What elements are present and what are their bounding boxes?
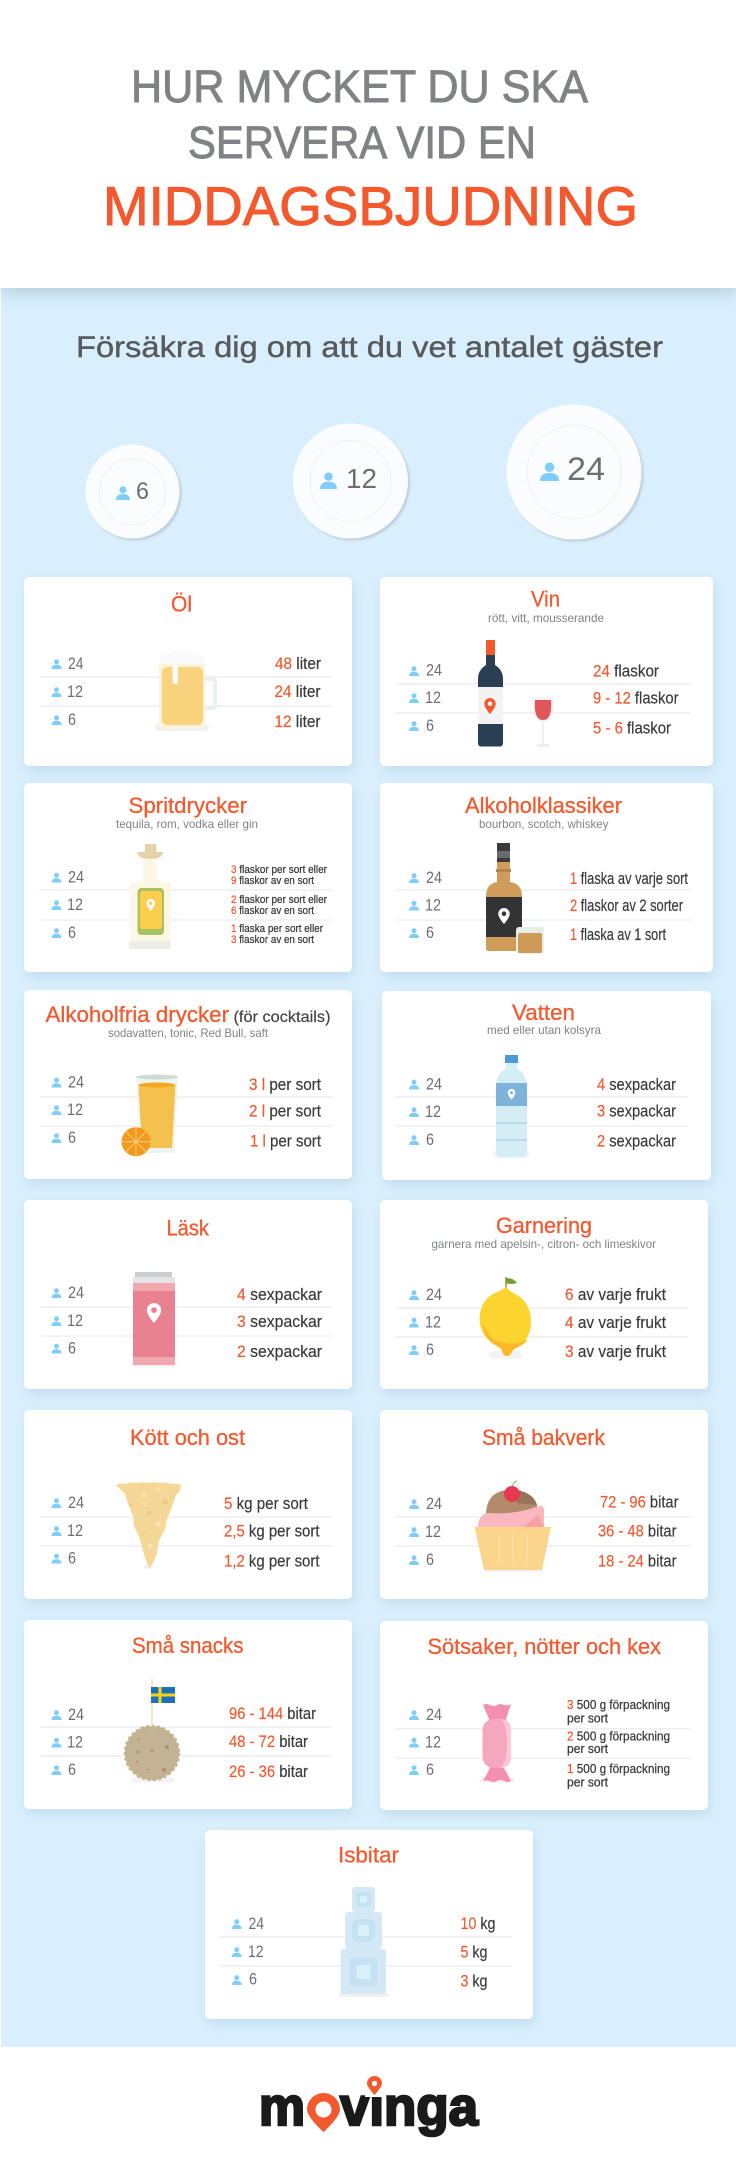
- heading: Isbitar: Isbitar: [338, 1843, 399, 1868]
- row: 6 guests: 1,2 kg per sort: [224, 1552, 320, 1571]
- title line 2: SERVERA VID EN: [188, 117, 536, 168]
- panel: Läsk: [24, 1200, 352, 1389]
- heading: Garnering: Garnering: [496, 1213, 592, 1238]
- icon: wine bottle: [478, 640, 503, 746]
- title line 3: MIDDAGSBJUDNING: [103, 175, 638, 237]
- row: 24 guests: 24: [426, 661, 442, 680]
- heading: Spritdrycker: Spritdrycker: [128, 793, 247, 818]
- row: 24 guests: 4 sexpackar: [597, 1075, 676, 1094]
- row: 24 guests: 24: [68, 654, 84, 673]
- row: 12 guests: 2 l per sort: [249, 1102, 321, 1121]
- row: 6 guests: [409, 1340, 666, 1361]
- row: 6 guests: per sort: [567, 1776, 608, 1790]
- title line 1: HUR MYCKET DU SKA: [131, 61, 588, 112]
- row: 6 guests: 6: [426, 923, 434, 942]
- icon: lemon: [480, 1277, 531, 1359]
- row: 24 guests: 24: [68, 1283, 84, 1302]
- plate: 24 guests: [506, 404, 642, 540]
- footer panel: [0, 2047, 736, 2168]
- row: 12 guests: 9 - 12 flaskor: [593, 689, 679, 708]
- heading: Små snacks: Små snacks: [132, 1633, 244, 1658]
- row: 6 guests: [52, 710, 321, 731]
- row: 6 guests: 1 l per sort: [250, 1132, 321, 1151]
- panel: Kött och ost: [24, 1410, 352, 1599]
- row: 24 guests: [409, 1698, 670, 1726]
- row: 12 guests: 2,5 kg per sort: [224, 1522, 320, 1541]
- row: 24 guests: [52, 1704, 316, 1724]
- heading: Vatten: Vatten: [512, 1000, 575, 1025]
- subheading: Spritdrycker: tequila, rom, vodka eller gin: [116, 817, 258, 831]
- row: 12 guests: 48 - 72 bitar: [229, 1732, 308, 1751]
- row: 6 guests: [52, 1549, 320, 1571]
- row: 6 guests: 18 - 24 bitar: [598, 1552, 677, 1571]
- row: 24 guests: 6 av varje frukt: [565, 1285, 666, 1304]
- row: 24 guests: [52, 654, 321, 673]
- panel: Sötsaker, nötter och kex: [380, 1621, 708, 1810]
- heading: Öl: Öl: [171, 592, 192, 616]
- row: 12 guests: [409, 1102, 676, 1121]
- row: 24 guests: per sort: [567, 1712, 608, 1726]
- logo: movinga: o: [315, 2093, 332, 2123]
- row: 24 guests: 3 500 g förpackning: [567, 1698, 670, 1712]
- panel: Vatten: [382, 991, 711, 1180]
- row: 6 guests: [52, 1760, 308, 1781]
- row: 24 guests: 3 flaskor per sort eller: [231, 864, 327, 876]
- row: 12 guests: [409, 688, 679, 708]
- panel: Öl: [24, 577, 352, 766]
- row: 12 guests: 2 flaskor av 2 sorter: [570, 896, 683, 915]
- icon: whiskey bottle: [486, 843, 522, 951]
- row: 24 guests: [409, 868, 688, 888]
- row: 24 guests: 48 liter: [275, 654, 321, 673]
- row: 12 guests: [52, 1311, 322, 1331]
- icon: tequila bottle: [129, 844, 171, 949]
- subheading: Vatten: med eller utan kolsyra: [487, 1023, 601, 1037]
- row: 12 guests: 12: [425, 688, 441, 707]
- row: 24 guests: [409, 1075, 676, 1094]
- panel: Vin: [380, 577, 713, 766]
- row: 24 guests: [409, 1285, 666, 1304]
- heading: Alkoholfria drycker: Alkoholfria drycker: [46, 1002, 229, 1027]
- row: 6 guests: [52, 923, 323, 946]
- row: 6 guests: 6: [426, 1340, 434, 1359]
- header panel: [0, 0, 736, 288]
- row: 24 guests: 3 l per sort: [249, 1075, 321, 1094]
- icon: candy: [479, 1704, 515, 1783]
- row: 12 guests: [52, 894, 327, 917]
- row: 24 guests: [52, 864, 327, 887]
- row: 24 guests: [52, 1073, 321, 1094]
- icon: ice cubes: [339, 1887, 388, 1997]
- row: 24 guests: 96 - 144 bitar: [229, 1704, 316, 1723]
- row: 24 guests: 24 flaskor: [593, 662, 659, 681]
- row: 6 guests: 3 kg: [460, 1972, 488, 1991]
- row: 24 guests: [52, 1493, 308, 1513]
- icon: cupcake: [474, 1481, 551, 1572]
- panel: Alkoholfria drycker: [24, 990, 352, 1179]
- row: 12 guests: 12: [425, 1102, 441, 1121]
- row: 12 guests: per sort: [567, 1742, 608, 1756]
- row: 12 guests: 12: [67, 895, 83, 914]
- panel: Garnering: [380, 1200, 708, 1389]
- row: 12 guests: 12: [67, 1733, 83, 1752]
- row: 12 guests: 2 flaskor per sort eller: [231, 894, 327, 906]
- row: 6 guests: [409, 1760, 670, 1790]
- row: 24 guests: [52, 1283, 322, 1304]
- icon: beer mug: [155, 649, 215, 731]
- icon: soda can: [132, 1272, 176, 1367]
- row: 6 guests: 1 500 g förpackning: [567, 1762, 670, 1776]
- row: 6 guests: 2 sexpackar: [237, 1342, 322, 1361]
- icon: wine glass: [533, 697, 553, 747]
- row: 6 guests: 6: [426, 1760, 434, 1779]
- row: 6 guests: 6: [68, 1760, 76, 1779]
- row: 6 guests: 6: [68, 710, 76, 729]
- heading: Alkoholklassiker: Alkoholklassiker: [465, 793, 622, 818]
- row: 24 guests: 10 kg: [460, 1914, 496, 1933]
- row: 6 guests: [409, 923, 666, 944]
- row: 12 guests: 3 sexpackar: [237, 1312, 322, 1331]
- row: 12 guests: [232, 1942, 488, 1962]
- row: 6 guests: 3 av varje frukt: [565, 1342, 666, 1361]
- row: 6 guests: [52, 1128, 321, 1151]
- row: 12 guests: 3 sexpackar: [597, 1102, 676, 1121]
- row: 12 guests: 12: [67, 1311, 83, 1330]
- panel: Spritdrycker: [24, 783, 352, 972]
- logo: movinga: [259, 2074, 479, 2137]
- row: 24 guests: 24: [426, 1705, 442, 1724]
- row: 6 guests: 5 - 6 flaskor: [593, 719, 671, 738]
- row: 24 guests: 24: [248, 1914, 264, 1933]
- row: 6 guests: 26 - 36 bitar: [229, 1762, 308, 1781]
- subheading: Vin: rött, vitt, mousserande: [488, 611, 604, 625]
- subheading: Alkoholklassiker: bourbon, scotch, whiskey: [479, 817, 608, 831]
- plate: 24 guests: 24: [567, 451, 605, 487]
- logo: movinga: m: [259, 2077, 305, 2137]
- row: 24 guests: 72 - 96 bitar: [600, 1493, 679, 1512]
- row: 6 guests: 6: [249, 1970, 257, 1989]
- row: 24 guests: 24: [68, 868, 84, 887]
- row: 12 guests: 12: [248, 1942, 264, 1961]
- row: 24 guests: [232, 1914, 496, 1933]
- heading: Små bakverk: Små bakverk: [482, 1425, 606, 1450]
- row: 6 guests: 6: [426, 1550, 434, 1569]
- row: 12 guests: 12: [425, 1313, 441, 1332]
- row: 12 guests: 6 flaskor av en sort: [231, 905, 314, 917]
- row: 6 guests: 2 sexpackar: [597, 1132, 676, 1151]
- plate: 6 guests: [86, 444, 180, 538]
- row: 6 guests: 6: [68, 1128, 76, 1147]
- row: 12 guests: [52, 682, 321, 701]
- row: 24 guests: 24: [426, 1075, 442, 1094]
- row: 6 guests: 6: [426, 716, 434, 735]
- subheading: Alkoholfria drycker: sodavatten, tonic, Red Bull, saft: [108, 1026, 269, 1040]
- panel: Isbitar: [205, 1830, 533, 2019]
- row: 24 guests: [409, 1493, 679, 1513]
- subheading: Garnering: garnera med apelsin-, citron- och limeskivor: [432, 1237, 656, 1251]
- subtitle: Försäkra dig om att du vet antalet gäster: [76, 331, 663, 364]
- row: 12 guests: 5 kg: [460, 1943, 488, 1962]
- row: 6 guests: 12 liter: [274, 712, 321, 731]
- heading: Sötsaker, nötter och kex: Sötsaker, nötter och kex: [428, 1634, 661, 1659]
- row: 12 guests: [409, 1730, 670, 1756]
- row: 6 guests: [409, 1130, 676, 1151]
- row: 24 guests: [409, 661, 659, 681]
- logo: movinga: vinga: [340, 2077, 479, 2137]
- row: 12 guests: [52, 1100, 321, 1121]
- row: 24 guests: 24: [68, 1493, 84, 1512]
- icon: water bottle: [494, 1055, 529, 1158]
- row: 6 guests: 3 flaskor av en sort: [231, 934, 314, 946]
- row: 6 guests: [409, 716, 671, 738]
- row: 6 guests: 6: [68, 923, 76, 942]
- heading: Kött och ost: Kött och ost: [130, 1425, 245, 1450]
- row: 12 guests: 12: [67, 1100, 83, 1119]
- icon: biscuit with Swedish flag: [125, 1679, 179, 1782]
- row: 6 guests: 6: [68, 1549, 76, 1568]
- row: 12 guests: 2 500 g förpackning: [567, 1730, 670, 1744]
- row: 24 guests: 24: [68, 1705, 84, 1724]
- row: 12 guests: [409, 896, 683, 915]
- row: 12 guests: 12: [67, 1521, 83, 1540]
- row: 12 guests: 12: [425, 1733, 441, 1752]
- row: 12 guests: 12: [425, 1522, 441, 1541]
- row: 24 guests: 24: [426, 1494, 442, 1513]
- row: 24 guests: 1 flaska av varje sort: [570, 869, 688, 888]
- row: 12 guests: [52, 1521, 320, 1541]
- icon: juice glass with orange: [122, 1074, 178, 1156]
- row: 24 guests: 24: [68, 1073, 84, 1092]
- icon: cheese slice: [116, 1482, 181, 1570]
- row: 12 guests: 4 av varje frukt: [565, 1313, 666, 1332]
- row: 12 guests: [52, 1732, 308, 1752]
- row: 6 guests: 6: [68, 1339, 76, 1358]
- panel: Alkoholklassiker: [380, 783, 713, 972]
- plate: 12 guests: [293, 424, 408, 538]
- row: 24 guests: 9 flaskor av en sort: [231, 875, 314, 887]
- row: 12 guests: [409, 1522, 677, 1541]
- row: 6 guests: 1 flaska av 1 sort: [570, 925, 666, 944]
- row: 12 guests: 12: [67, 682, 83, 701]
- row: 6 guests: 6: [426, 1130, 434, 1149]
- panel: Små bakverk: [380, 1410, 708, 1599]
- row: 6 guests: [409, 1550, 677, 1571]
- row: 24 guests: 4 sexpackar: [237, 1285, 322, 1304]
- row: 6 guests: 1 flaska per sort eller: [231, 923, 323, 935]
- plate: 12 guests: 12: [346, 463, 377, 494]
- row: 12 guests: 24 liter: [274, 682, 321, 701]
- heading: Läsk: Läsk: [166, 1216, 210, 1241]
- panel: Små snacks: [24, 1620, 352, 1809]
- plate: 6 guests: 6: [136, 478, 149, 505]
- row: 24 guests: 24: [426, 1285, 442, 1304]
- heading note: (för cocktails): [234, 1009, 330, 1026]
- row: 6 guests: [52, 1339, 322, 1361]
- row: 12 guests: [409, 1313, 666, 1332]
- icon: whiskey glass: [516, 927, 544, 954]
- heading: Vin: Vin: [531, 587, 560, 612]
- row: 6 guests: [232, 1970, 488, 1991]
- row: 24 guests: 5 kg per sort: [224, 1494, 308, 1513]
- row: 12 guests: 36 - 48 bitar: [598, 1522, 677, 1541]
- row: 24 guests: 24: [426, 868, 442, 887]
- row: 12 guests: 12: [425, 896, 441, 915]
